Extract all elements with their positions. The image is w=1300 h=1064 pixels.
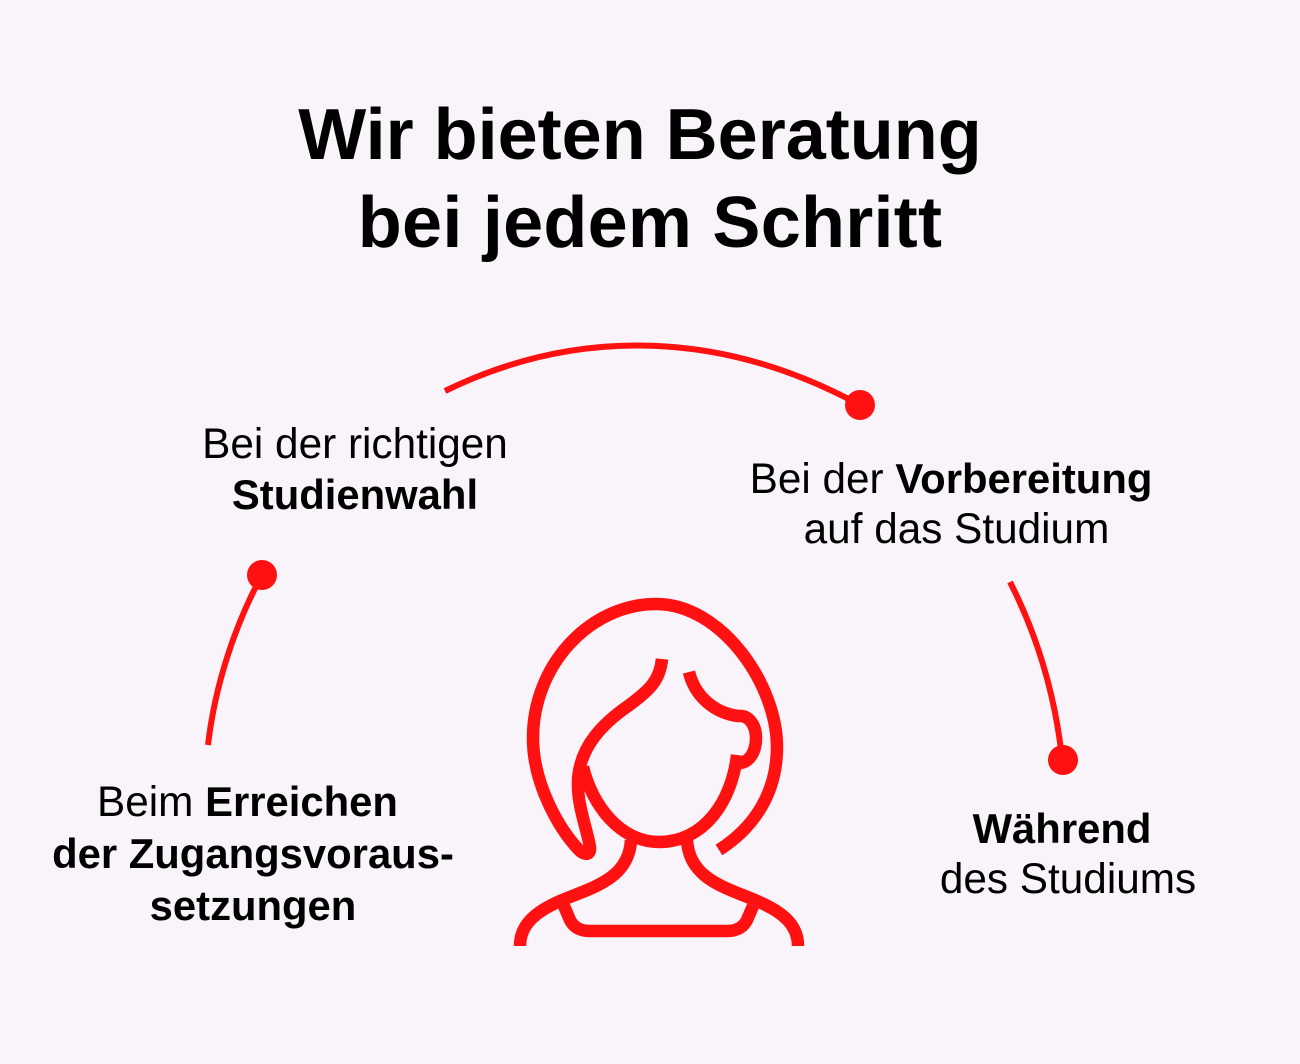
- icon: woman with bob haircut: [520, 604, 798, 946]
- label: Vorbereitung: auf das Studium: [804, 505, 1109, 552]
- icon: face and ear: [583, 672, 756, 842]
- label: Während des Studiums: Während: [973, 805, 1151, 852]
- label: Studienwahl: [202, 420, 508, 518]
- title: bei jedem Schritt: [358, 183, 942, 263]
- label: Vorbereitung: Bei der Vorbereitung: [750, 455, 1152, 502]
- label: Während des Studiums: des Studiums: [940, 855, 1196, 902]
- label: Studienwahl: Studienwahl: [232, 471, 478, 518]
- arrow: top arc: [445, 345, 875, 420]
- arrow: right arc: [1010, 582, 1078, 775]
- label: Zugangsvoraussetzungen: [52, 778, 454, 929]
- label: Während des Studiums: [940, 805, 1196, 902]
- label: Zugangsvoraussetzungen: der Zugangsvoraus-: [52, 830, 454, 877]
- title: Wir bieten Beratung: [298, 95, 982, 175]
- title: [298, 95, 982, 263]
- icon: hair outline: [533, 604, 777, 854]
- icon: neck and shoulders: [520, 840, 798, 946]
- arrow: left arc: [208, 560, 277, 745]
- label: Vorbereitung: [750, 455, 1152, 552]
- label: Zugangsvoraussetzungen: Beim Erreichen: [97, 778, 398, 825]
- label: Zugangsvoraussetzungen: setzungen: [150, 882, 356, 929]
- label: Studienwahl: Bei der richtigen: [202, 420, 508, 467]
- icon: collar: [564, 906, 753, 931]
